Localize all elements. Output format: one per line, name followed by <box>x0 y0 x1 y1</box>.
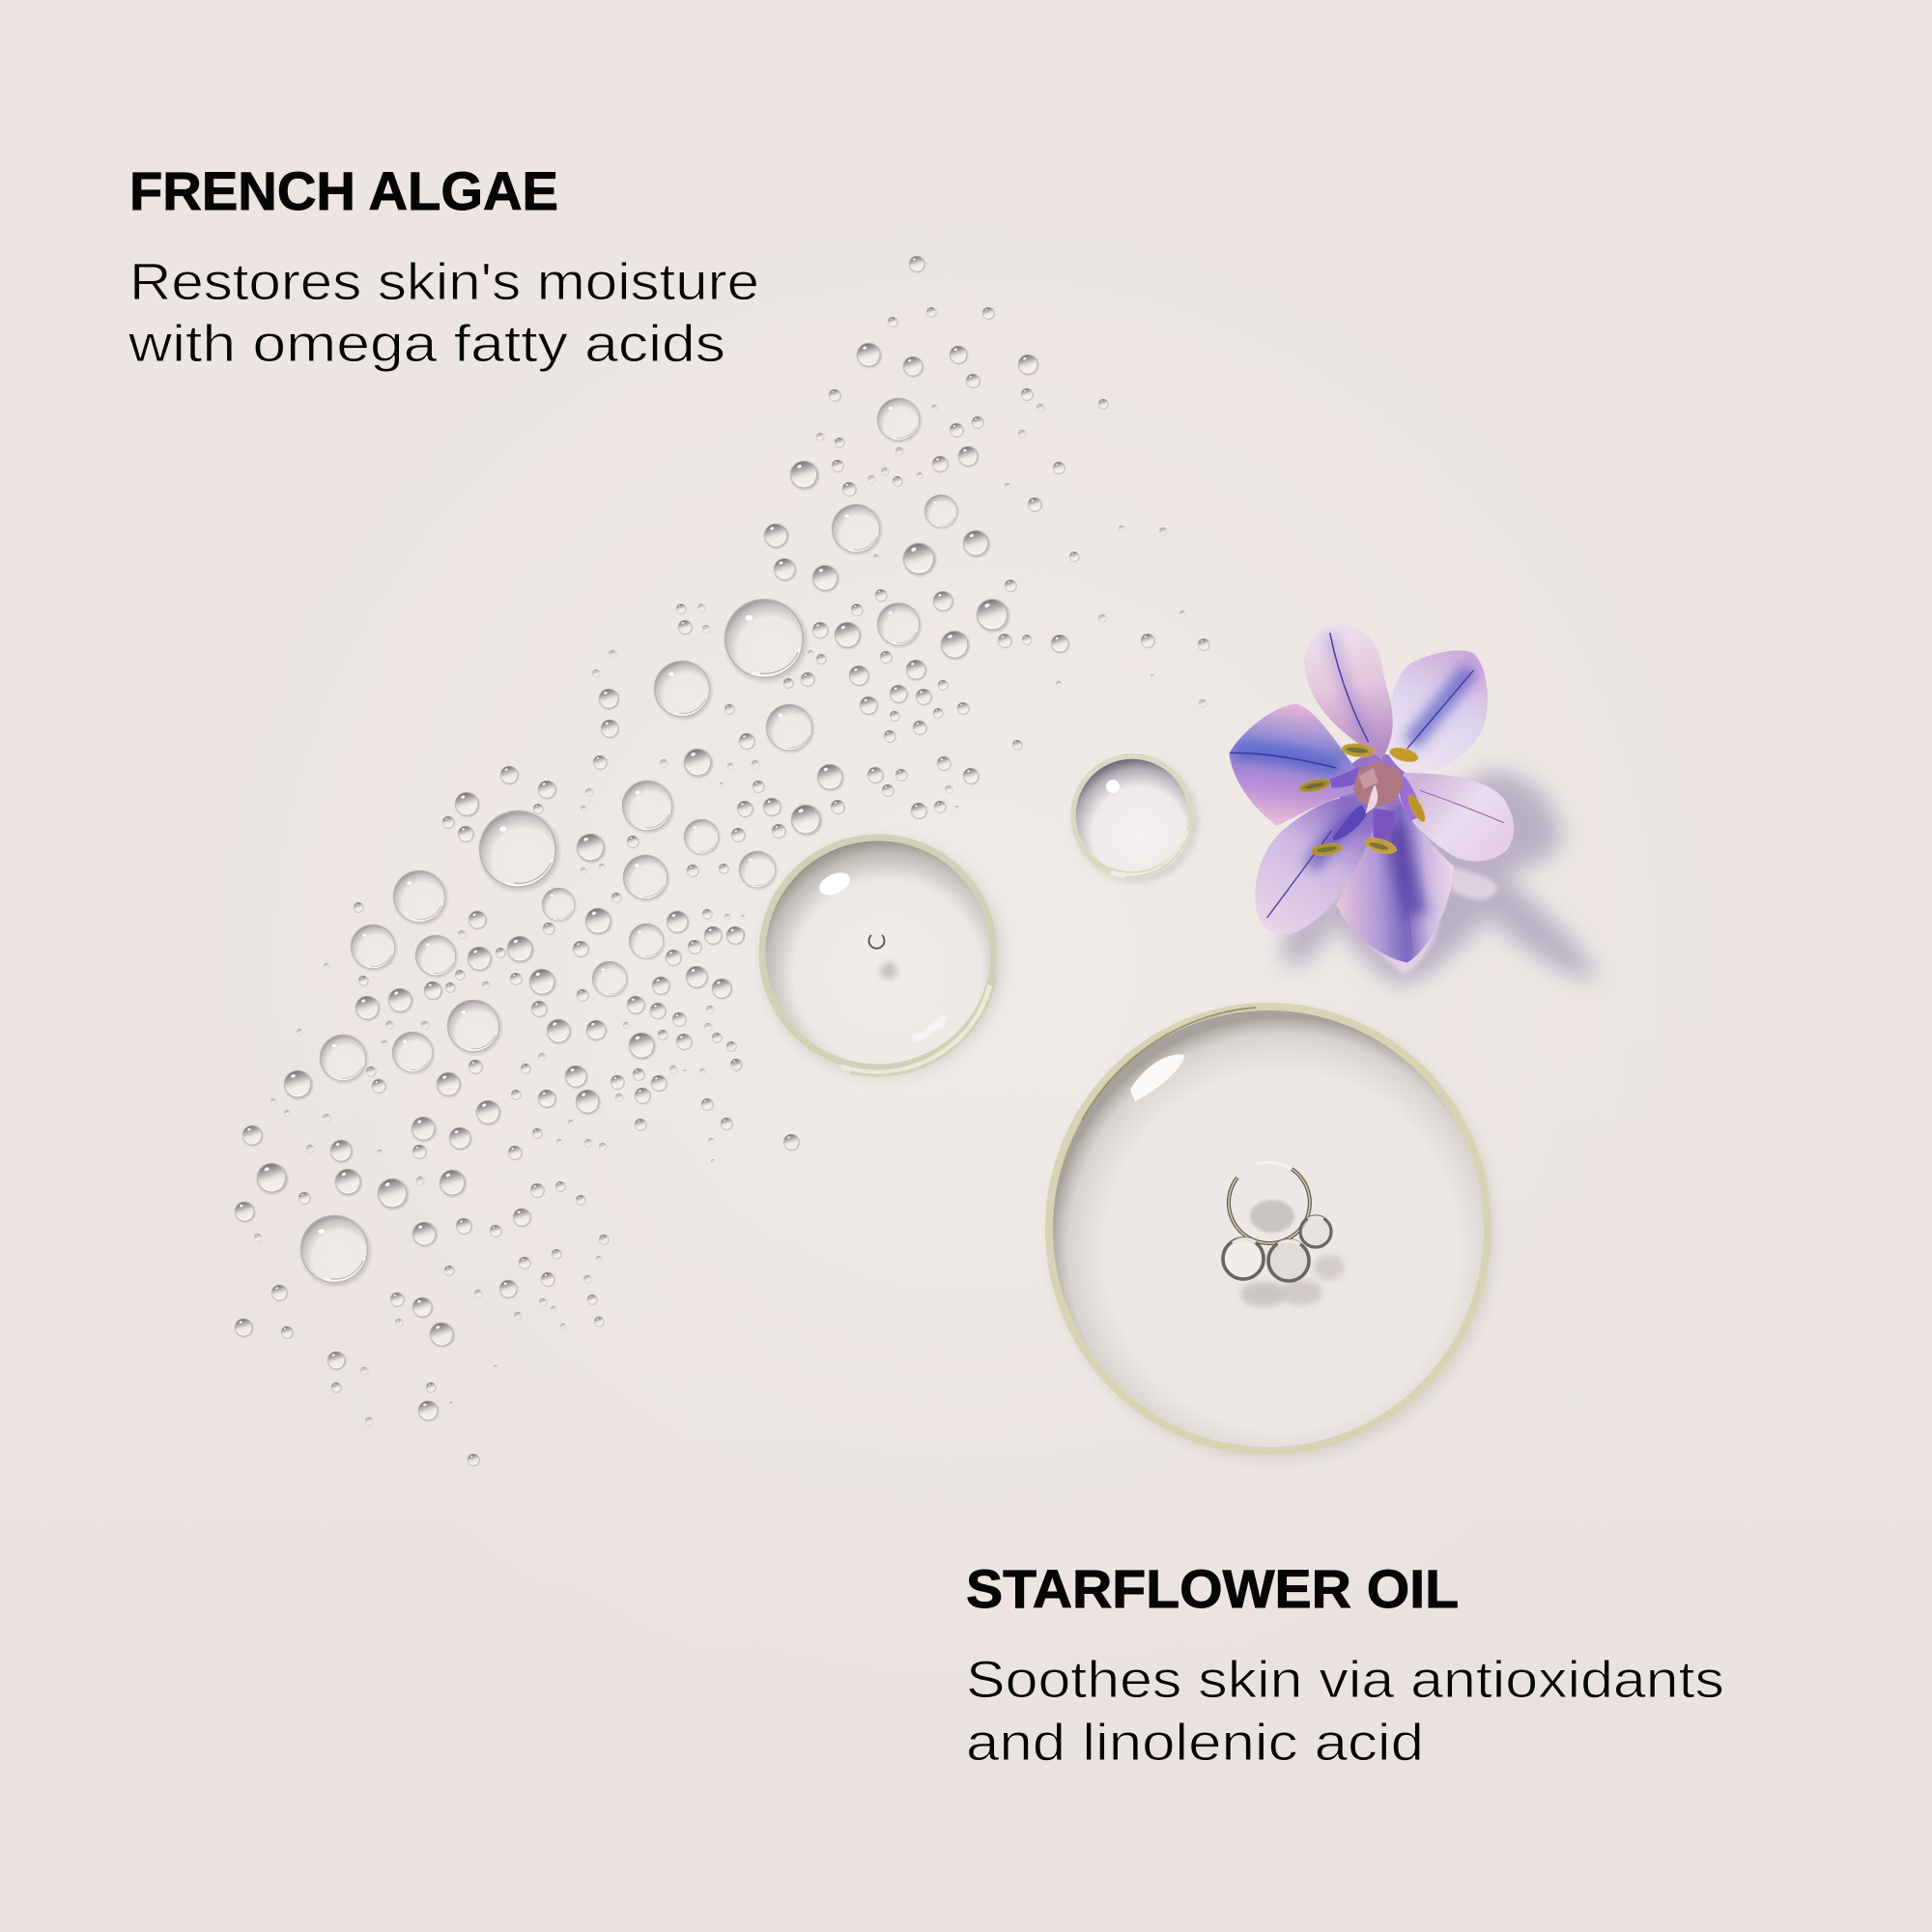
text block: Starflower Oil description <box>966 1651 1724 1772</box>
medium droplets <box>234 255 1210 1467</box>
tiny droplets <box>254 404 1208 1426</box>
oil droplet: medium with tiny ring <box>760 836 1005 1078</box>
flower centre <box>1330 761 1423 840</box>
water droplets field: french algae <box>234 255 1210 1467</box>
flower petals <box>1229 623 1514 976</box>
oil pool: large with ring <box>1048 1006 1497 1462</box>
flower: starflower <box>1229 623 1597 985</box>
large droplets <box>298 397 960 1289</box>
flower anthers <box>1298 742 1428 857</box>
text block: French Algae description: Restores skin's moisture <box>129 253 759 311</box>
heading: French Algae: FRENCH ALGAE <box>129 160 558 221</box>
oil droplet: small <box>1072 755 1199 883</box>
text block: French Algae description: with omega fatty acids <box>128 315 725 373</box>
text block: French Algae description <box>128 253 759 373</box>
heading: Starflower Oil: STARFLOWER OIL <box>966 1558 1459 1619</box>
flower shadow <box>1282 772 1597 985</box>
ring charm <box>1223 1162 1345 1307</box>
text block: Starflower Oil description: and linolenic acid <box>966 1714 1424 1772</box>
text block: Starflower Oil description: Soothes skin via antioxidants <box>966 1651 1724 1709</box>
tiny ring <box>869 935 885 949</box>
